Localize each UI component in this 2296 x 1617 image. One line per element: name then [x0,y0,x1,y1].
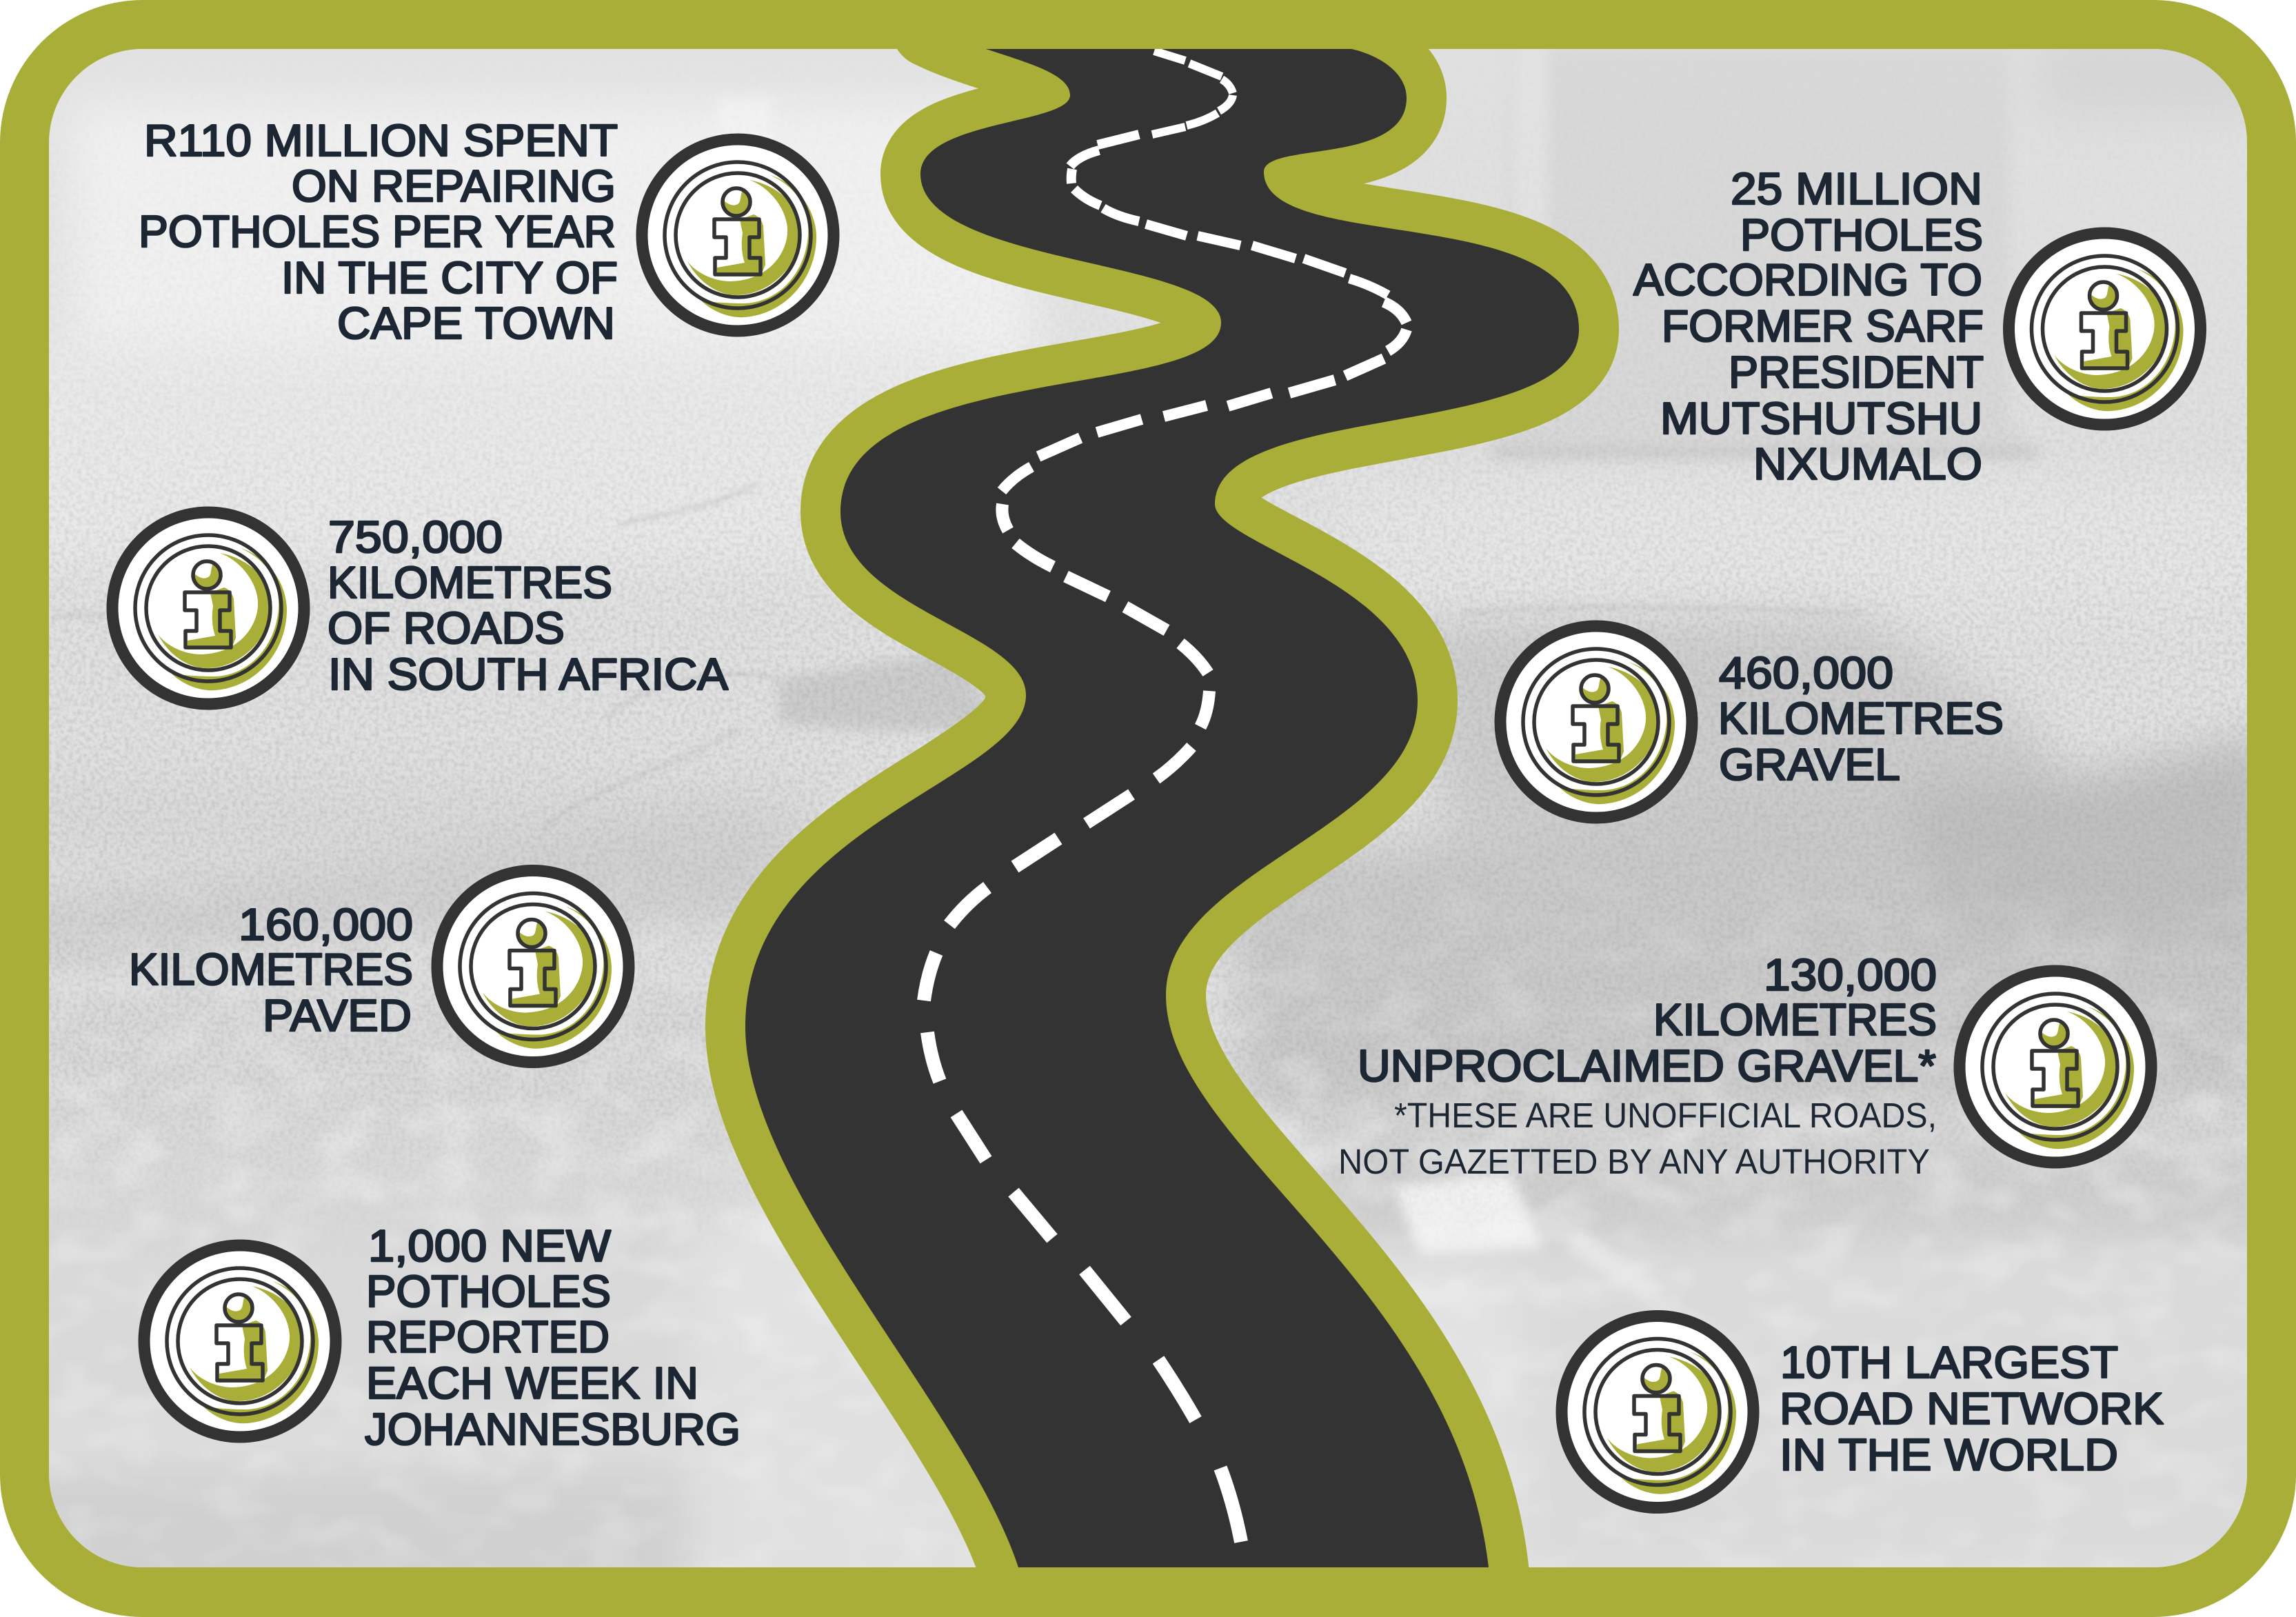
winding road with green verge [745,0,1579,1617]
text: 750,000 kilometres: OF ROADS [328,603,565,653]
text: 160,000 kilometres paved: PAVED [263,990,412,1041]
text: 10th largest road network: 10TH LARGEST [1780,1337,2118,1387]
text: 460,000 kilometres gravel: 460,000 [1719,647,1893,698]
text: 750,000 kilometres: IN SOUTH AFRICA [328,649,729,699]
icon: info badge [437,870,629,1062]
text: R110 million spent: CAPE TOWN [337,298,615,348]
text: 1,000 new potholes: JOHANNESBURG [365,1404,741,1454]
text: 460,000 kilometres gravel [1718,647,2004,790]
text: 460,000 kilometres gravel: KILOMETRES [1718,693,2004,743]
text: 750,000 kilometres: KILOMETRES [328,557,612,607]
text: 160,000 kilometres paved: 160,000 [239,899,413,950]
callout: 25 million potholes [1633,163,2201,489]
text: 130,000 kilometres unproclaimed gravel: UNPROCLAIMED GRAVEL* [1358,1041,1936,1091]
text: 160,000 kilometres paved: KILOMETRES [129,944,413,994]
text: R110 million spent: ON REPAIRING [292,161,616,211]
callout: 460,000 km gravel [1500,626,2004,818]
footnote: unofficial roads: *THESE ARE UNOFFICIAL ROADS, [1394,1096,1937,1135]
text: 10th largest road network: IN THE WORLD [1780,1429,2118,1480]
callout: 1,000 new potholes [144,1221,741,1454]
icon: info badge [2009,233,2201,425]
text: 1,000 new potholes: REPORTED [366,1312,610,1362]
text: 1,000 new potholes [365,1221,741,1454]
text: 25 million potholes: MUTSHUTSHU [1660,393,1982,443]
text: 25 million potholes: POTHOLES [1740,210,1983,260]
text: 130,000 kilometres unproclaimed gravel [1358,950,1937,1091]
icon: info badge [1500,626,1692,818]
callout: 750,000 km of roads [112,512,729,704]
text: 10th largest road network: ROAD NETWORK [1780,1383,2164,1434]
text: 1,000 new potholes: EACH WEEK IN [366,1358,698,1408]
text: 10th largest road network [1780,1337,2164,1480]
icon: info badge [1562,1316,1753,1507]
text: 25 million potholes [1633,163,1984,489]
callout: R110 million [139,115,834,348]
callout: 130,000 km unproclaimed gravel [1338,950,2151,1181]
text: 25 million potholes: 25 MILLION [1731,163,1982,214]
icon: info badge [144,1245,336,1437]
callout: 10th largest road network [1562,1316,2164,1507]
text: 750,000 kilometres: 750,000 [328,512,503,562]
icon: info badge [1960,971,2151,1163]
text: R110 million spent: R110 MILLION SPENT [144,115,618,165]
footnote: unofficial roads [1338,1096,1937,1181]
text: 1,000 new potholes: POTHOLES [366,1266,611,1316]
icon: info badge [642,139,834,331]
text: 130,000 kilometres unproclaimed gravel: KILOMETRES [1653,994,1937,1045]
text: 130,000 kilometres unproclaimed gravel: 130,000 [1764,950,1937,1000]
footnote: unofficial roads: NOT GAZETTED BY ANY AUTHORITY [1338,1142,1930,1181]
text: 25 million potholes: PRESIDENT [1729,347,1984,397]
text: 750,000 kilometres [328,512,729,699]
callout: 160,000 km paved [129,870,629,1062]
text: 25 million potholes: ACCORDING TO [1633,254,1982,305]
text: 1,000 new potholes: 1,000 NEW [368,1221,612,1271]
text: 460,000 kilometres gravel: GRAVEL [1719,739,1900,790]
text: 25 million potholes: FORMER SARF [1662,301,1984,351]
road centre dashed line [924,51,1407,1542]
text: R110 million spent: POTHOLES PER YEAR [139,206,616,257]
text: R110 million spent [139,115,618,348]
text: 25 million potholes: NXUMALO [1753,439,1982,489]
text: 160,000 kilometres paved [129,899,413,1041]
text: R110 million spent: IN THE CITY OF [281,252,618,303]
icon: info badge [112,512,304,704]
